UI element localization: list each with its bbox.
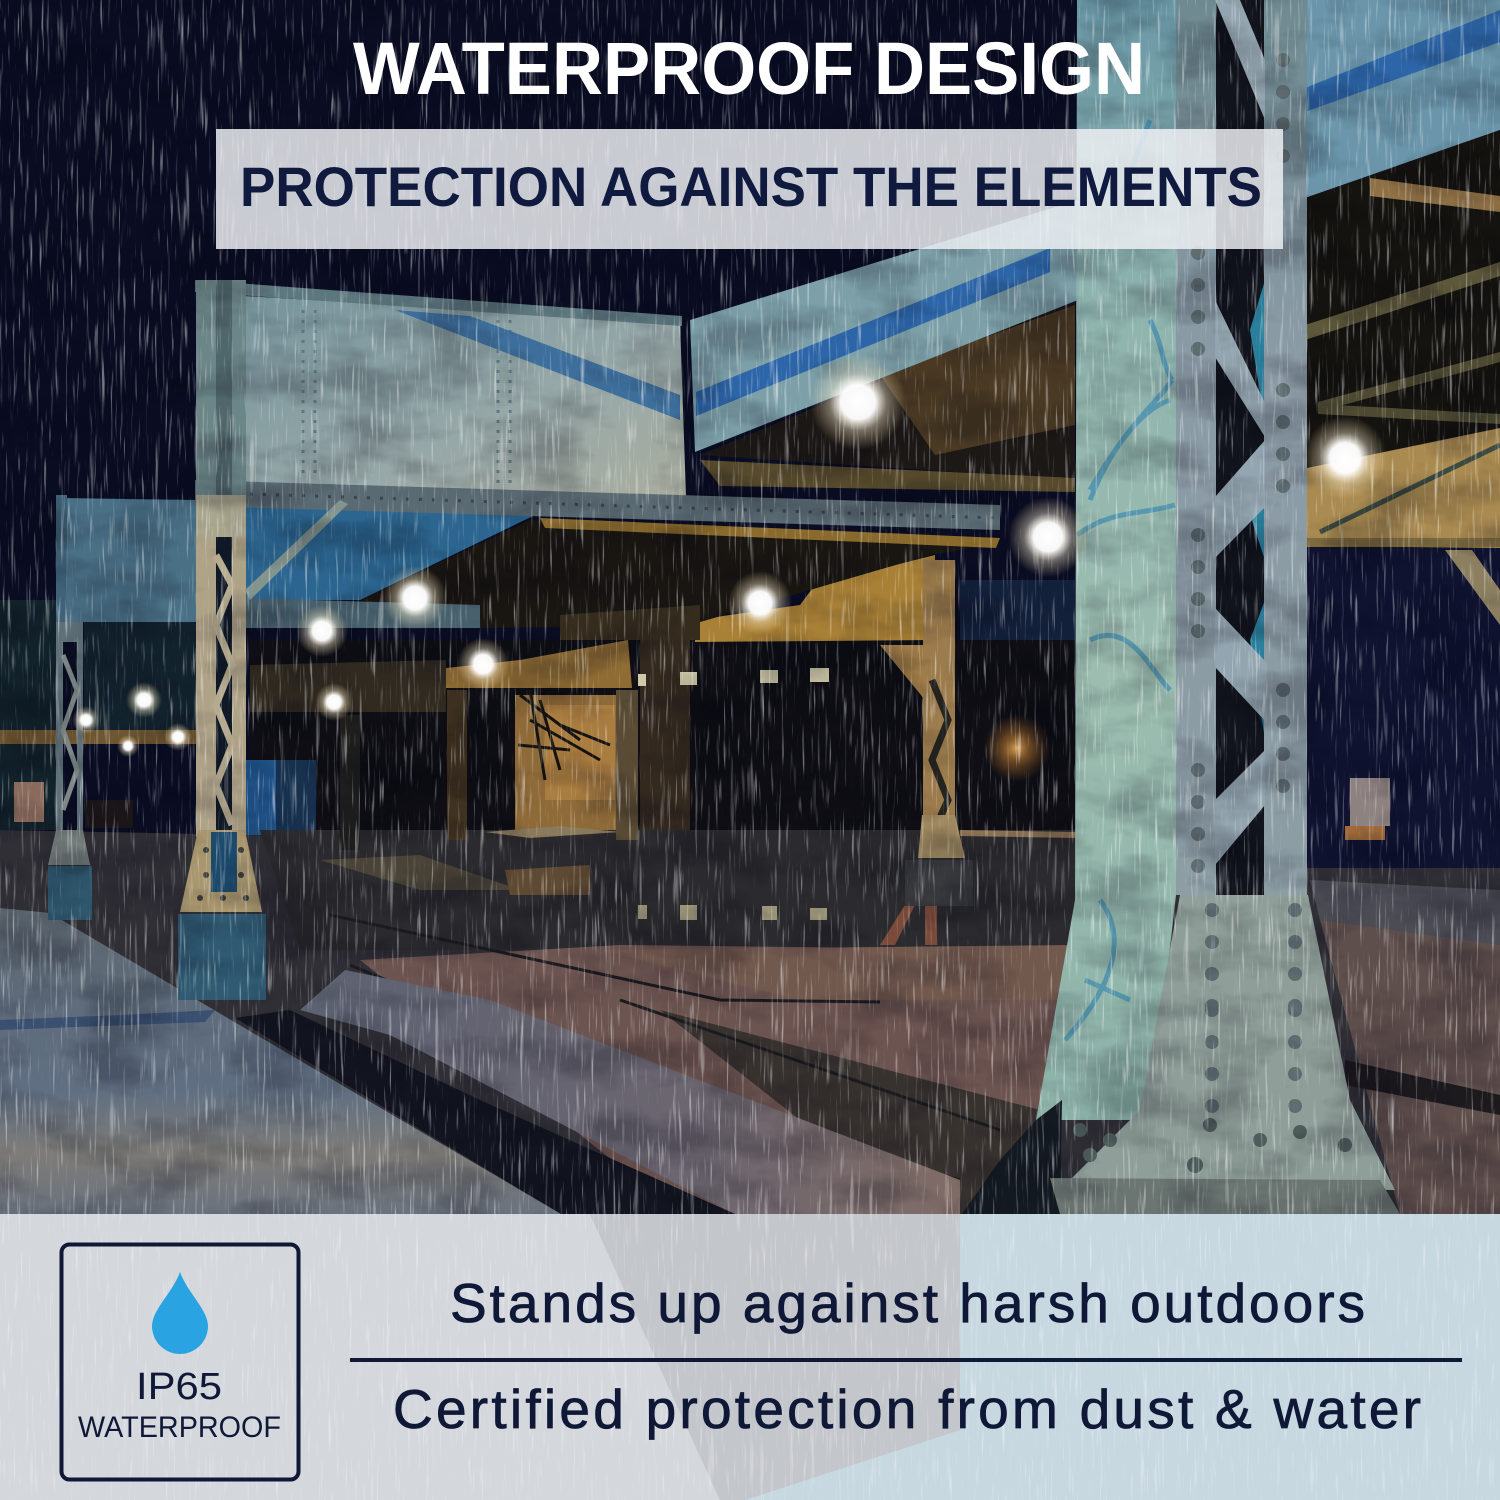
left outer girder bbox=[62, 498, 198, 622]
divider bbox=[350, 1358, 1462, 1362]
waterproof label: WATERPROOF bbox=[78, 1411, 281, 1444]
orange underside mid bbox=[446, 640, 632, 688]
girder bottom rail bbox=[195, 480, 1000, 530]
street surface far bbox=[0, 830, 1500, 1214]
pillar reflection bbox=[880, 905, 915, 945]
orange pillar bbox=[880, 560, 973, 906]
dark gutter bbox=[235, 1010, 735, 1214]
puddle glow bbox=[320, 855, 520, 890]
brace bbox=[245, 500, 348, 600]
window reflections bbox=[638, 905, 827, 920]
badge: IP65 waterproof bbox=[62, 1244, 298, 1480]
base plate bbox=[1050, 1178, 1400, 1214]
blue streaks on big pillar bbox=[1065, 120, 1175, 1040]
big pillar teal face bbox=[1036, 0, 1176, 1120]
reddish street patch bbox=[360, 945, 1070, 1214]
right orange panel bbox=[1307, 428, 1500, 548]
right lit shop bg bbox=[1350, 778, 1390, 826]
sidewalk bbox=[0, 908, 561, 1214]
subtitle banner: PROTECTION AGAINST THE ELEMENTS bbox=[240, 155, 1262, 218]
girder blue stripe bbox=[395, 310, 680, 420]
dark street band bbox=[660, 1010, 1040, 1214]
night sky bbox=[0, 0, 1500, 900]
orange lit wall bbox=[515, 695, 620, 830]
angled center girder bbox=[690, 200, 1078, 452]
IP65 label: IP65 bbox=[136, 1366, 222, 1408]
main left girder bbox=[245, 296, 686, 496]
underdeck dark bbox=[360, 520, 990, 628]
title: WATERPROOF DESIGN bbox=[353, 27, 1145, 110]
bare tree bbox=[518, 690, 610, 780]
right street patch bbox=[1320, 920, 1500, 1214]
lattice bars bbox=[1215, 0, 1267, 865]
rivets bbox=[1191, 53, 1290, 873]
tram track lines bbox=[330, 915, 1000, 1180]
pillar lower dark edge bbox=[962, 1100, 1062, 1214]
distant amber glow bbox=[983, 714, 1051, 782]
girder top rail bbox=[195, 280, 682, 326]
left pillar bbox=[178, 280, 266, 1000]
far left pillar bbox=[48, 495, 92, 920]
lower continuation of image bbox=[0, 1214, 1500, 1500]
mid pillars bbox=[340, 690, 638, 850]
icon: water drop bbox=[152, 1272, 208, 1354]
sidewalk tone band bbox=[0, 1010, 215, 1030]
benefit line 1: Stands up against harsh outdoors bbox=[450, 1272, 1365, 1334]
center girder blue stripe bbox=[696, 248, 1050, 416]
column base bbox=[1060, 895, 1395, 1190]
right under-deck bbox=[1305, 130, 1500, 560]
benefit line 2: Certified protection from dust & water bbox=[393, 1378, 1421, 1440]
distant dark buildings bbox=[250, 640, 1080, 860]
subtitle banner bbox=[216, 129, 1283, 249]
bottom panel bbox=[0, 1214, 1500, 1500]
orange underside far bbox=[695, 555, 936, 642]
upper right stripe bbox=[1305, 10, 1500, 112]
concrete strip bbox=[300, 970, 960, 1214]
lamps bbox=[72, 354, 1387, 757]
right column bbox=[1176, 0, 1307, 895]
upper right girder bbox=[1300, 0, 1500, 198]
lit windows bbox=[638, 668, 829, 686]
right brace bbox=[1445, 550, 1500, 625]
right lit shop bbox=[1350, 775, 1392, 825]
far curb highlights bbox=[485, 826, 620, 838]
blue lit columns bbox=[246, 760, 276, 835]
left distance lit band bbox=[0, 730, 196, 744]
girder rivet rows bbox=[303, 310, 510, 488]
